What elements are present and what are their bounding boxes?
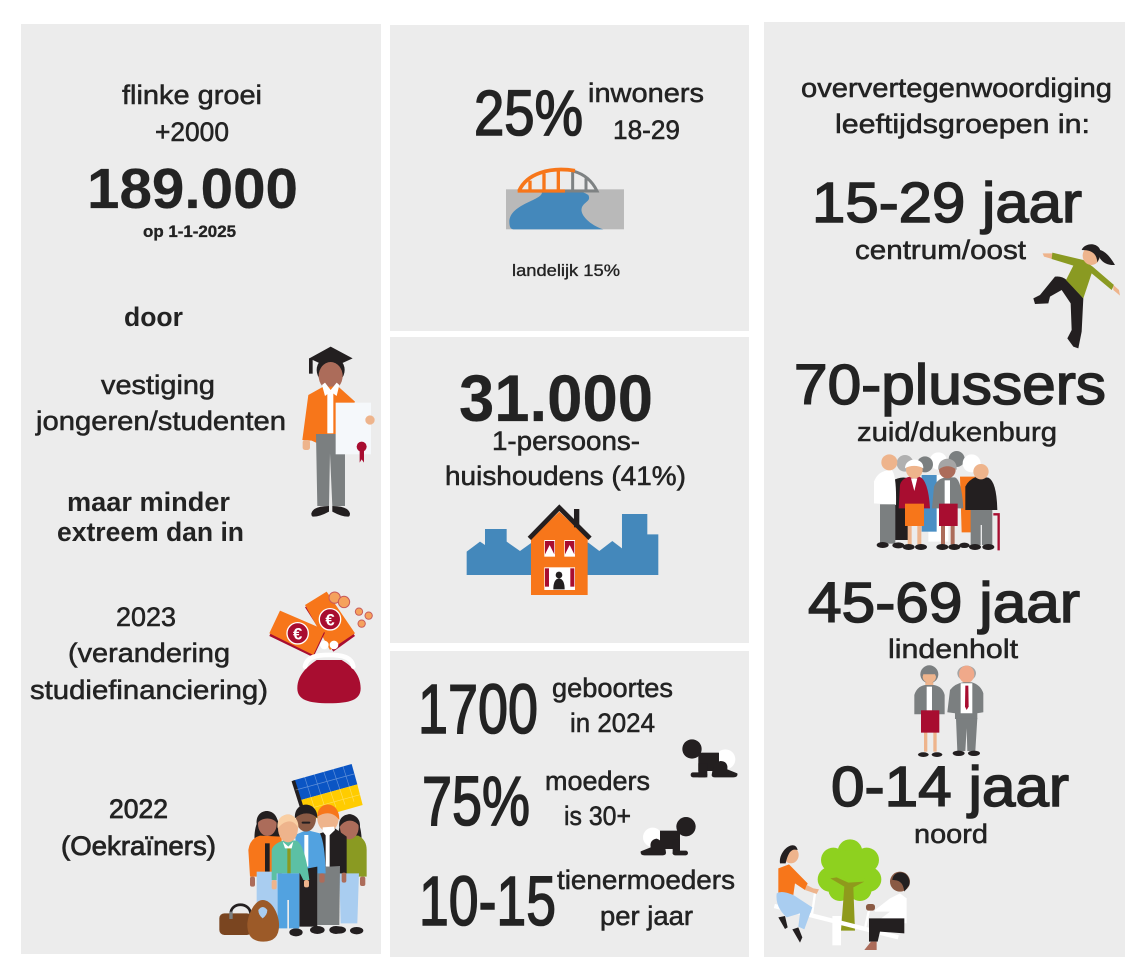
icon: baby crawling right-to-left	[682, 739, 737, 777]
icon: baby crawling left-to-right	[641, 817, 696, 855]
number: 0-14 jaar: 0-14 jaar	[831, 755, 1069, 819]
text: extreem dan in: extreem dan in	[57, 517, 244, 547]
text: huishoudens: huishoudens (41%)	[445, 461, 686, 491]
number: 25%: 25%	[474, 77, 583, 149]
icon: house in skyline	[467, 508, 658, 595]
text: landelijk 15%: landelijk 15%	[512, 261, 620, 280]
number: 75%: 75%	[422, 762, 530, 840]
text: Oekraïners: (Oekraïners)	[61, 831, 216, 861]
number: 189.000: 189.000	[87, 157, 298, 221]
text: in 2024: in 2024	[570, 708, 655, 738]
icon: graduate	[302, 347, 375, 517]
text: verandering: (verandering	[68, 638, 230, 668]
heading: flinke groei: flinke groei	[122, 80, 262, 110]
text: +2000: +2000	[155, 117, 229, 147]
text: tienermoeders: tienermoeders	[557, 865, 735, 895]
panel: growth	[21, 24, 381, 954]
icon: jumping girl	[1033, 244, 1120, 348]
text: geboortes: geboortes	[552, 673, 673, 703]
text: 1-persoons-: 1-persoons-	[492, 426, 640, 456]
icon: bridge	[506, 170, 624, 229]
text: centrum/oost: centrum/oost	[855, 235, 1027, 265]
number: 45-69 jaar: 45-69 jaar	[808, 571, 1080, 635]
number: 31.000: 31.000	[459, 361, 653, 435]
icon: money purse: €	[293, 624, 302, 643]
heading: oververtegenwoordiging: oververtegenwoordiging	[801, 73, 1112, 103]
number: 10-15: 10-15	[419, 862, 556, 940]
icon: middle-aged couple	[914, 665, 983, 757]
icon: seesaw with tree	[774, 839, 910, 950]
text: studiefinanciering: studiefinanciering)	[30, 675, 268, 705]
text: 2023: 2023	[116, 602, 176, 632]
text: vestiging: vestiging	[101, 370, 215, 400]
text: door: door	[124, 302, 183, 332]
text: lindenholt: lindenholt	[888, 634, 1019, 664]
panel: one-person households	[390, 337, 749, 643]
number: 70-plussers: 70-plussers	[794, 353, 1106, 417]
icon: Ukrainians group	[219, 764, 367, 942]
text: jongeren/studenten: jongeren/studenten	[35, 406, 286, 436]
icon: money purse: €	[325, 610, 335, 629]
icon: money purse	[269, 592, 372, 703]
text: maar minder: maar minder	[67, 487, 230, 517]
text: moeders: moeders	[545, 766, 650, 796]
panel: births	[390, 651, 749, 957]
number: 1700: 1700	[418, 670, 538, 748]
text: zuid/dukenburg: zuid/dukenburg	[857, 417, 1057, 447]
text: inwoners: inwoners	[588, 78, 704, 108]
heading: leeftijdsgroepen in: leeftijdsgroepen in:	[835, 109, 1090, 139]
text: 18-29: 18-29	[613, 115, 680, 145]
panel: age groups	[764, 22, 1125, 957]
text: is 30+: is 30+	[564, 801, 631, 831]
number: 15-29 jaar: 15-29 jaar	[812, 171, 1082, 235]
text: per jaar: per jaar	[600, 901, 693, 931]
panel: young residents	[390, 25, 749, 331]
icon: elderly group	[874, 451, 999, 550]
text: noord: noord	[914, 819, 988, 849]
text: date: op 1-1-2025	[143, 222, 236, 241]
text: 2022: 2022	[109, 794, 168, 824]
